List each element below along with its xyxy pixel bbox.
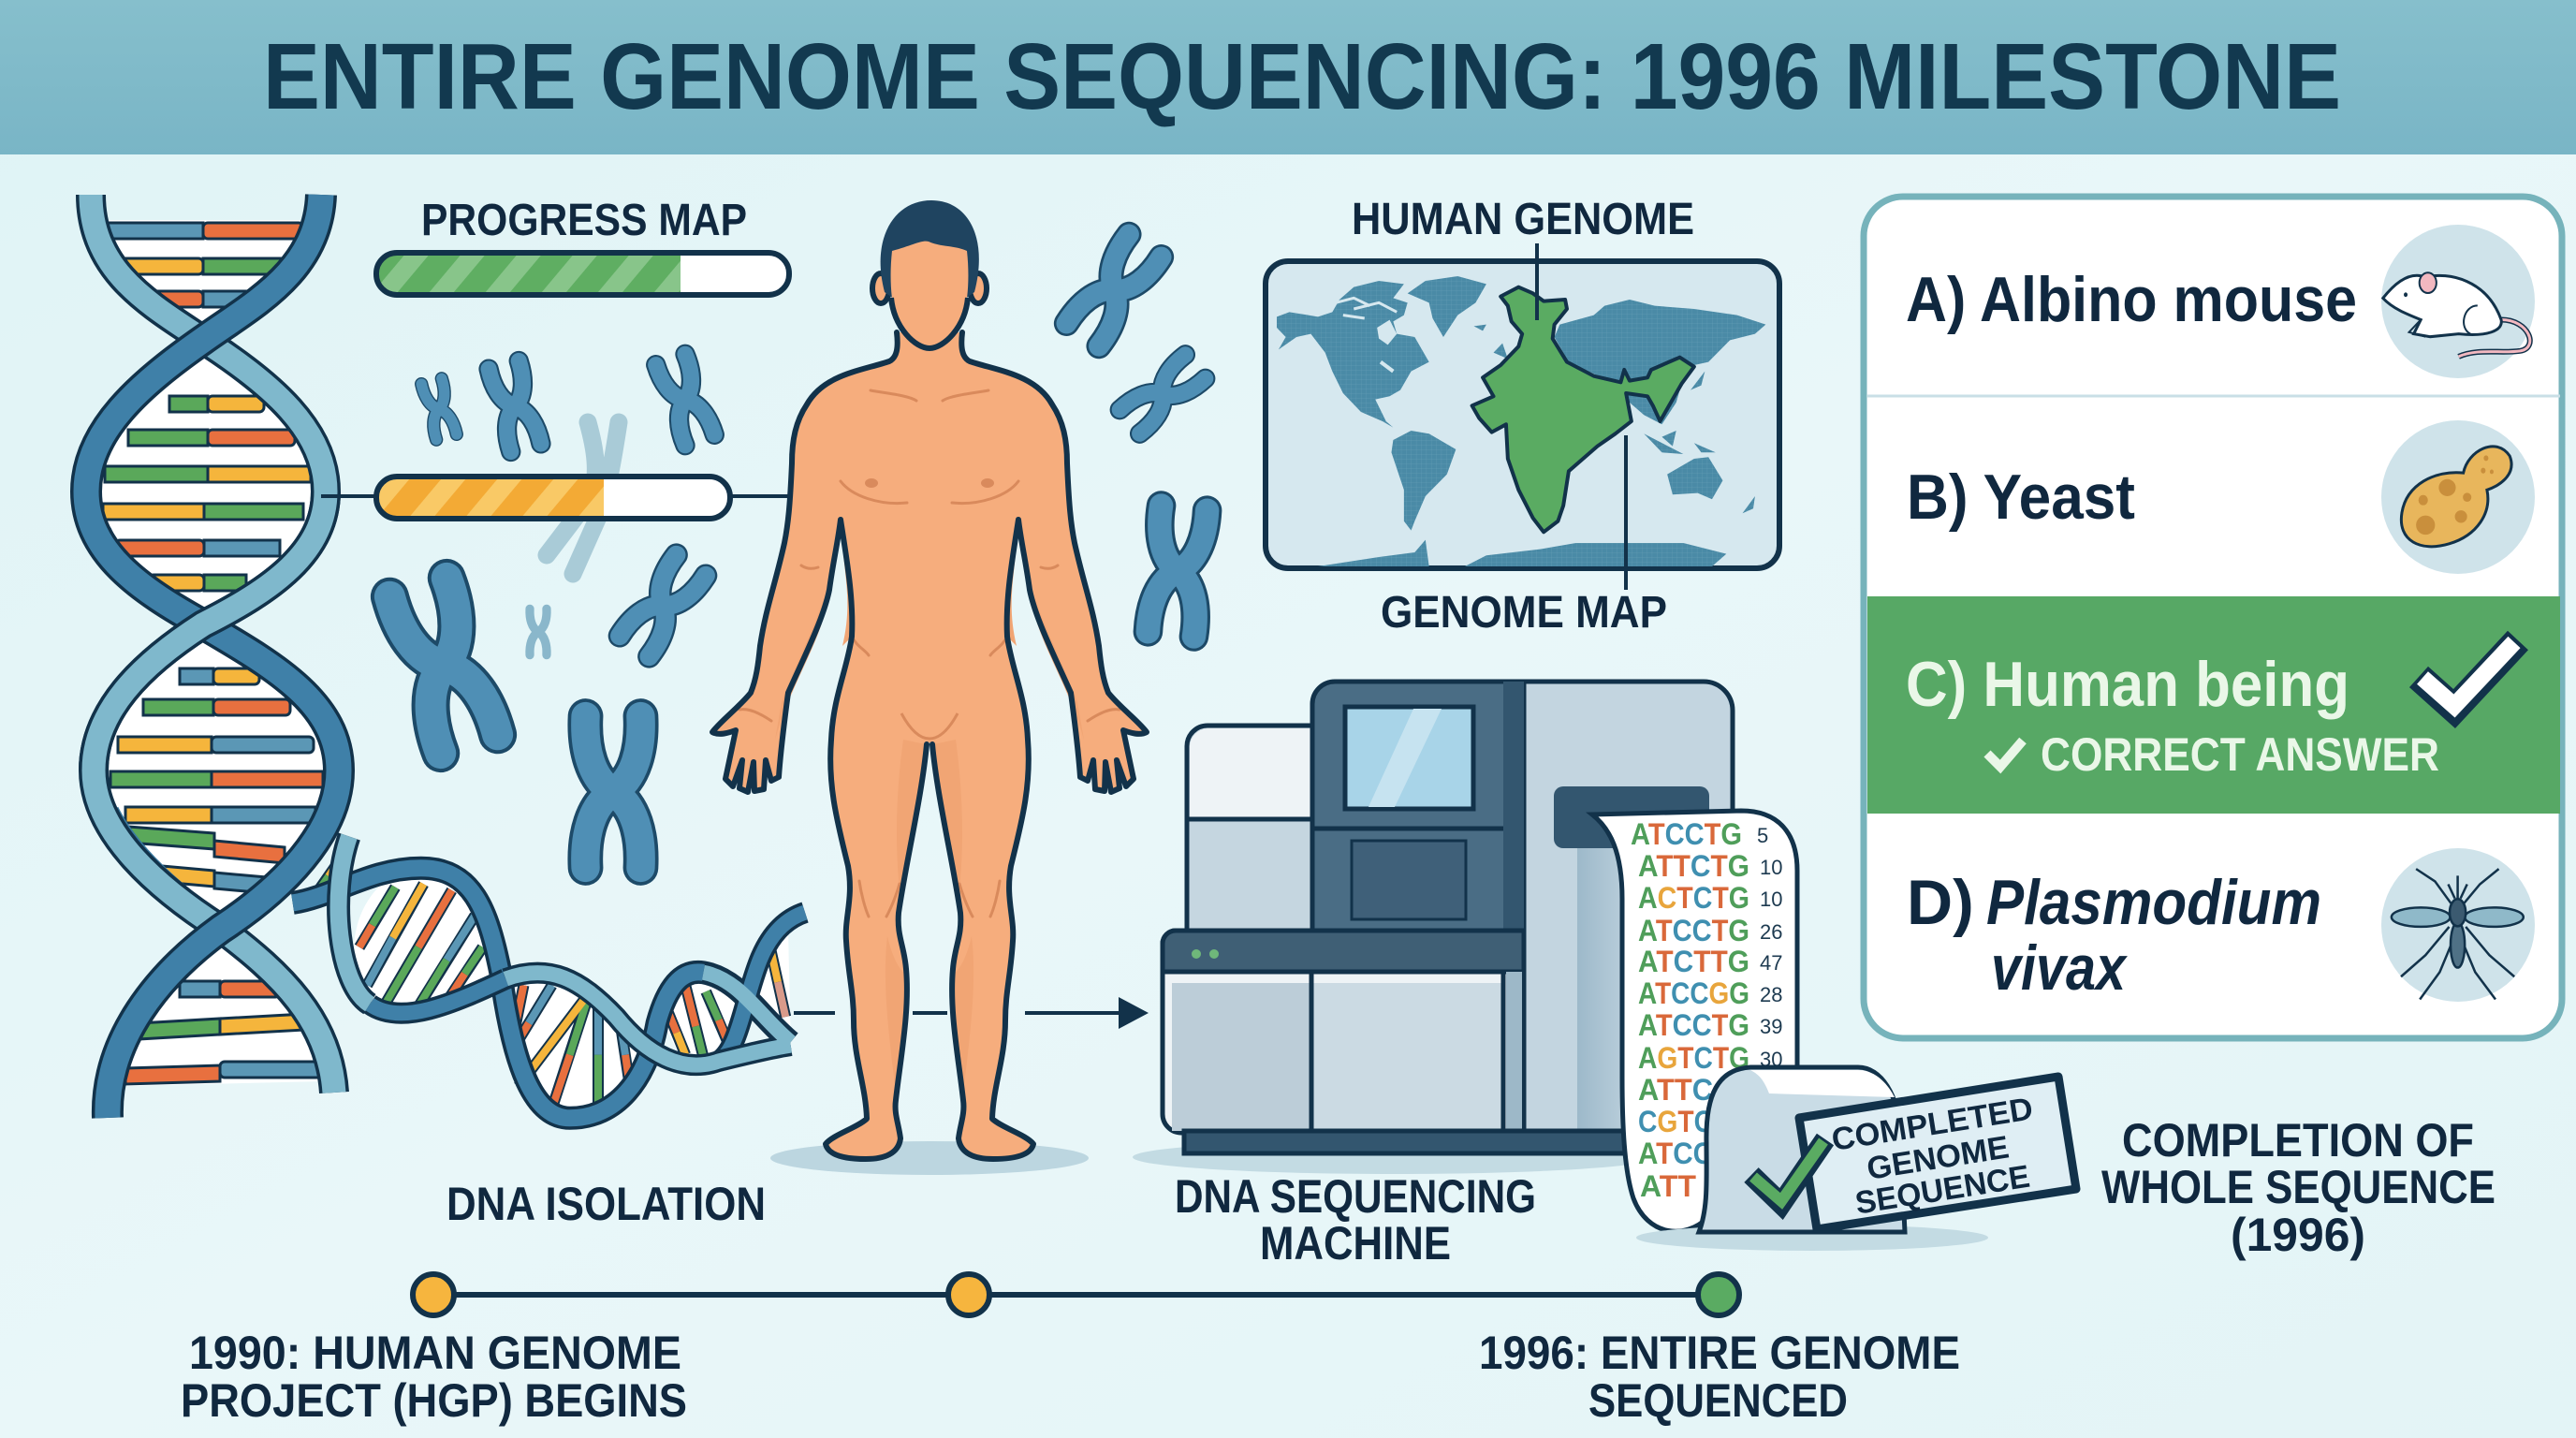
timeline [413, 1274, 1739, 1315]
icon: large check [2419, 640, 2518, 709]
upper left cabinet [1187, 726, 1312, 936]
DNA dark strand [86, 195, 339, 1118]
sequence rows: ATCCTG [1631, 817, 1742, 851]
milestone dot 1996 [1698, 1274, 1739, 1315]
sequence rows: 28 [1760, 983, 1782, 1006]
completed tag: SEQUENCE [1852, 1159, 2032, 1222]
sequence rows: AGTCTG [1638, 1041, 1749, 1075]
label: progress map: PROGRESS MAP [421, 196, 747, 245]
sequence rows: CGTC [1638, 1105, 1713, 1138]
sequence rows: ATTCTG [1638, 849, 1749, 883]
sequence rows: 47 [1760, 951, 1782, 975]
icon: mosquito [2392, 869, 2524, 999]
icon: mouse [2383, 272, 2530, 357]
header band [0, 0, 2576, 154]
main DNA double helix [86, 195, 339, 1118]
paper roll [1699, 1067, 1905, 1232]
sequence rows: ATCCTG [1638, 1008, 1749, 1042]
central control column [1312, 682, 1524, 931]
label: DNA sequencing machine: DNA SEQUENCING [1175, 1170, 1536, 1223]
chromosomes: right of figure [1066, 234, 1208, 637]
label: DNA isolation: DNA ISOLATION [446, 1178, 766, 1230]
face [891, 242, 968, 348]
small DNA strands [293, 836, 805, 1118]
lower cabinet [1163, 931, 1524, 1133]
chromosomes: left cluster [389, 354, 714, 868]
screen [1345, 707, 1473, 809]
dashed arrow: DNA to sequencer [794, 997, 1149, 1029]
completed genome roll and tag [1699, 1067, 2076, 1232]
option C: correct answer: C) Human being [1906, 649, 2349, 720]
completed tag: COMPLETED [1829, 1091, 2035, 1158]
printed sequence paper [1592, 811, 1797, 1231]
option A [1906, 225, 2535, 378]
body [712, 332, 1147, 1159]
option B: B) Yeast [1907, 462, 2135, 533]
sequence rows: ATT [1640, 1169, 1696, 1203]
milestone dot middle [948, 1274, 989, 1315]
sequence rows: ACTCTG [1638, 881, 1749, 915]
completed tag [1799, 1077, 2076, 1229]
progress bar: green [376, 253, 789, 295]
small unwinding DNA helix [293, 836, 805, 1118]
leader lines [1537, 243, 1626, 590]
option C: correct answer [1867, 596, 2560, 814]
hair and ears [872, 200, 987, 303]
title: ENTIRE GENOME SEQUENCING: 1996 MILESTONE [263, 24, 2341, 129]
DNA light strand front crossing [94, 492, 326, 770]
machine base [1184, 1131, 1638, 1153]
human figure [712, 200, 1147, 1159]
option D: vivax [1991, 932, 2129, 1004]
sequence rows: ATCC [1638, 1137, 1713, 1170]
sequence rows: ATCCGG [1638, 976, 1749, 1010]
option D: Plasmodium [1986, 867, 2321, 938]
machine shadow [1133, 1140, 1657, 1174]
DNA inner back-ribbon shading [105, 530, 323, 906]
answer options panel [1864, 197, 2562, 1038]
label: 1990: PROJECT (HGP) BEGINS [181, 1374, 687, 1427]
label: 1996 [1479, 1327, 1960, 1427]
option D: D) [1907, 867, 1974, 938]
sequence rows: 39 [1760, 1015, 1782, 1038]
highlighted India shape [1472, 287, 1694, 532]
chromosome: faint behind bar [547, 422, 619, 574]
sequence rows: ATCCTG [1638, 914, 1749, 947]
label: DNA sequencing machine [1175, 1170, 1536, 1269]
option C: correct answer: CORRECT ANSWER [2041, 728, 2439, 781]
sequence rows: 10 [1760, 888, 1782, 911]
sequence rows: ATTC [1638, 1073, 1713, 1107]
sequence rows: 10 [1760, 856, 1782, 879]
progress bar: orange [376, 477, 730, 519]
icon: small check [1987, 741, 2023, 767]
label: 1990 [181, 1327, 687, 1427]
small DNA rungs [315, 865, 785, 1108]
icon: yeast [2401, 447, 2511, 547]
DNA base pairs [103, 223, 323, 1084]
sequence rows: 30 [1760, 1048, 1782, 1071]
sequence rows: ATCTTG [1638, 945, 1749, 978]
continents [1277, 276, 1765, 566]
label: completion of whole sequence: (1996) [2231, 1209, 2365, 1261]
sequence rows: 5 [1757, 824, 1768, 847]
connector line: DNA to body [321, 494, 794, 498]
option B [1907, 420, 2535, 574]
roll shadow [1636, 1225, 1988, 1251]
label: 1990: 1990: HUMAN GENOME [189, 1327, 681, 1379]
label: 1996: SEQUENCED [1588, 1374, 1848, 1427]
label: DNA sequencing machine: MACHINE [1260, 1217, 1451, 1269]
icon: green check [1751, 1139, 1825, 1204]
label: human genome: HUMAN GENOME [1352, 195, 1694, 244]
completed tag: GENOME [1865, 1129, 2012, 1187]
milestone dot 1990 [413, 1274, 454, 1315]
option A: A) Albino mouse [1906, 264, 2357, 335]
paper slot [1554, 786, 1709, 848]
label: completion of whole sequence: COMPLETION OF [2122, 1114, 2474, 1167]
right cabinet [1516, 682, 1733, 1131]
figure shadow [770, 1141, 1089, 1175]
option D [1907, 848, 2535, 1004]
sequence rows: 26 [1760, 920, 1782, 944]
label: 1996: 1996: ENTIRE GENOME [1479, 1327, 1960, 1379]
label: completion of whole sequence: WHOLE SEQUENCE [2101, 1161, 2496, 1213]
DNA sequencing machine [1163, 682, 1733, 1153]
DNA light strand [91, 195, 334, 1093]
sequence rows [1631, 817, 1782, 1203]
genome world map [1266, 243, 1779, 590]
label: genome map: GENOME MAP [1381, 588, 1667, 638]
label: completion of whole sequence [2101, 1114, 2496, 1261]
